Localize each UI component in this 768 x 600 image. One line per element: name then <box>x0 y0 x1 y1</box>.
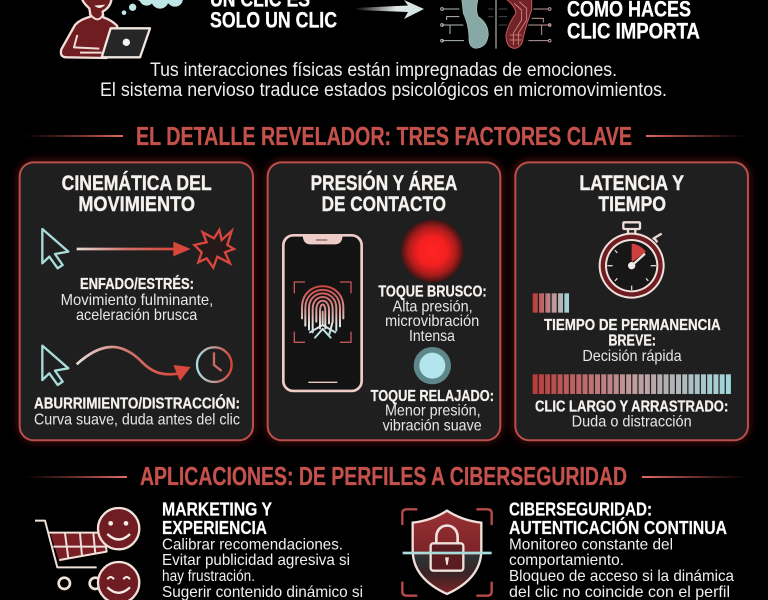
icon: blue touch <box>414 347 451 384</box>
panel: presion y area de contacto <box>268 162 500 440</box>
text: toque relajado <box>371 388 494 434</box>
text: ciberseguridad: Monitoreo constante del <box>509 536 673 554</box>
text: ciberseguridad: Bloqueo de acceso si la dinámica <box>509 568 734 585</box>
text: enfado: aceleración brusca <box>76 307 197 324</box>
text: marketing y experiencia: MARKETING Y <box>162 500 272 520</box>
text: toque brusco: TOQUE BRUSCO: <box>378 284 487 301</box>
text: clic largo <box>535 399 728 431</box>
text: enfado: ENFADO/ESTRÉS: <box>80 276 194 293</box>
icon: stopwatch <box>599 222 665 299</box>
text: aburrimiento: Curva suave, duda antes del clic <box>34 411 240 428</box>
panel: latencia y tiempo <box>515 162 748 440</box>
text: enfado <box>61 276 213 324</box>
text: clic largo: CLIC LARGO Y ARRASTRADO: <box>535 399 728 416</box>
text: toque relajado: Menor presión, <box>385 403 481 420</box>
text: clic largo: Duda o distracción <box>572 414 692 431</box>
text: tiempo de permanencia: TIEMPO DE PERMANENCIA <box>544 317 721 334</box>
intro text: El sistema nervioso traduce estados psicológicos en micromovimientos. <box>100 80 667 101</box>
heading: como haces clic importa <box>567 0 700 43</box>
chart: long bars <box>533 374 731 394</box>
icon: cursor curve to clock <box>42 346 232 385</box>
text: ciberseguridad: CIBERSEGURIDAD: <box>509 500 652 520</box>
heading: como haces clic importa: CLIC IMPORTA <box>567 18 700 43</box>
icon: red touch <box>401 220 464 282</box>
icon: cursor fast to burst <box>42 229 234 268</box>
text: toque brusco: microvibración <box>385 313 479 330</box>
text: marketing y experiencia: EXPERIENCIA <box>162 518 267 538</box>
text: toque brusco <box>378 284 487 345</box>
panel title: TIEMPO <box>598 192 666 216</box>
icon: phone with fingerprint <box>283 235 362 391</box>
intro text <box>100 60 667 101</box>
text: aburrimiento <box>34 394 240 428</box>
text: toque relajado: TOQUE RELAJADO: <box>371 388 494 405</box>
text: enfado: Movimiento fulminante, <box>61 292 213 309</box>
panel title: CINEMÁTICA DEL <box>62 170 212 195</box>
text: marketing y experiencia: Calibrar recomendaciones. <box>162 536 343 554</box>
panel glows <box>20 162 748 440</box>
text: marketing y experiencia: Evitar publicidad agresiva si <box>162 552 350 569</box>
panel title: DE CONTACTO <box>322 192 446 216</box>
text: toque brusco: Alta presión, <box>393 299 473 316</box>
icon: shield with padlock <box>402 509 492 596</box>
icon: footprints with circuit lines <box>441 0 551 49</box>
heading: un clic es solo un clic: SOLO UN CLIC <box>210 8 337 33</box>
text: ciberseguridad: comportamiento. <box>509 552 624 569</box>
panel title: LATENCIA Y <box>579 171 684 195</box>
panel title <box>62 170 212 216</box>
icon: cart with smileys <box>35 508 139 600</box>
text: marketing y experiencia <box>162 500 363 600</box>
icon: person with laptop and thought bubble <box>61 0 187 58</box>
text: tiempo de permanencia <box>544 317 721 365</box>
panel title: PRESIÓN Y ÁREA <box>311 170 457 195</box>
heading: un clic es solo un clic <box>210 0 337 33</box>
intro text: Tus interacciones físicas están impregnadas de emociones. <box>150 60 617 81</box>
text: toque relajado: vibración suave <box>383 417 482 434</box>
panel: cinematica del movimiento <box>20 162 253 440</box>
text: aburrimiento: ABURRIMIENTO/DISTRACCIÓN: <box>34 394 240 412</box>
text: ciberseguridad: AUTENTICACIÓN CONTINUA <box>509 517 727 538</box>
text: tiempo de permanencia: BREVE: <box>608 333 656 350</box>
text: tiempo de permanencia: Decisión rápida <box>582 348 682 365</box>
panel title <box>579 171 684 216</box>
text: ciberseguridad <box>509 500 734 600</box>
arrow: from click to how you click <box>355 0 424 19</box>
chart: short bars <box>533 293 569 313</box>
text: marketing y experiencia: hay frustración. <box>162 568 255 585</box>
text: toque brusco: Intensa <box>409 328 455 345</box>
panel title <box>311 170 457 216</box>
panel title: MOVIMIENTO <box>78 192 195 216</box>
